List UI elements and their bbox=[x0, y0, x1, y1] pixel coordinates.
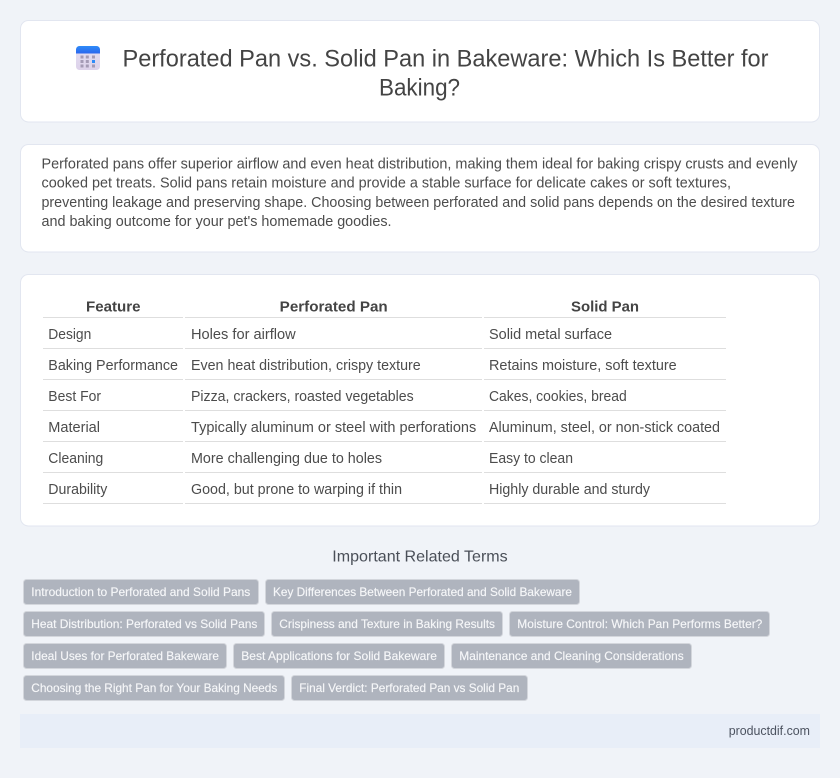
intro paragraph: cooked pet treats. Solid pans retain moisture and provide a stable surface for delicate cakes or soft textures, bbox=[42, 176, 731, 192]
title bbox=[122, 46, 768, 102]
tag bbox=[234, 644, 444, 668]
row: cleaning: Cleaning bbox=[48, 451, 103, 467]
table header row bbox=[86, 298, 639, 316]
tag bbox=[452, 644, 692, 668]
tag: Maintenance and Cleaning Considerations bbox=[459, 649, 684, 663]
tag bbox=[24, 612, 264, 636]
table header row: Feature bbox=[86, 298, 140, 316]
row: design bbox=[48, 327, 612, 343]
tag: Introduction to Perforated and Solid Pans bbox=[31, 585, 250, 599]
title: Baking? bbox=[379, 74, 460, 102]
tag bbox=[272, 612, 502, 636]
tag: Key Differences Between Perforated and Solid Bakeware bbox=[273, 585, 572, 599]
panel: introduction bbox=[20, 144, 820, 252]
row: best for: Pizza, crackers, roasted vegetables bbox=[191, 389, 414, 405]
row: best for: Best For bbox=[48, 389, 101, 405]
row: cleaning: More challenging due to holes bbox=[191, 451, 382, 467]
tag: Heat Distribution: Perforated vs Solid Pans bbox=[31, 617, 257, 631]
row: material bbox=[48, 420, 720, 436]
footer source text: productdif.com bbox=[729, 724, 810, 738]
row: design: Solid metal surface bbox=[489, 327, 612, 343]
row: cleaning bbox=[48, 451, 573, 467]
row: design: Design bbox=[48, 327, 91, 343]
tag bbox=[24, 580, 258, 604]
tag: Crispiness and Texture in Baking Results bbox=[279, 617, 495, 631]
tag bbox=[292, 676, 528, 700]
row: cleaning: Easy to clean bbox=[489, 451, 573, 467]
intro paragraph: and baking outcome for your pet's homemade goodies. bbox=[42, 214, 392, 230]
row: durability: Durability bbox=[48, 482, 108, 498]
tag bbox=[510, 612, 770, 636]
row: material: Aluminum, steel, or non-stick coated bbox=[489, 420, 720, 436]
tag: Final Verdict: Perforated Pan vs Solid Pan bbox=[299, 681, 519, 695]
table header row: Solid Pan bbox=[571, 298, 639, 316]
row: best for: Cakes, cookies, bread bbox=[489, 389, 627, 405]
panel: title header bbox=[20, 20, 820, 122]
tag bbox=[24, 676, 284, 700]
row: design: Holes for airflow bbox=[191, 327, 296, 343]
row: durability: Good, but prone to warping if thin bbox=[191, 482, 402, 498]
intro paragraph: preventing leakage and preserving shape. Choosing between perforated and solid pans depends on the desired texture bbox=[42, 195, 795, 211]
tags: related terms bbox=[24, 580, 770, 700]
tag bbox=[266, 580, 580, 604]
intro paragraph bbox=[42, 156, 798, 230]
table header row: Perforated Pan bbox=[280, 298, 388, 316]
intro paragraph: Perforated pans offer superior airflow and even heat distribution, making them ideal for baking crispy crusts and evenly bbox=[42, 156, 798, 172]
row: baking performance: Baking Performance bbox=[48, 358, 178, 374]
row: material: Typically aluminum or steel with perforations bbox=[191, 420, 476, 436]
tag: Best Applications for Solid Bakeware bbox=[241, 649, 437, 663]
title: Perforated Pan vs. Solid Pan in Bakeware: Which Is Better for bbox=[122, 46, 768, 72]
row: durability bbox=[48, 482, 651, 498]
row: baking performance: Even heat distribution, crispy texture bbox=[191, 358, 421, 374]
tag bbox=[24, 644, 226, 668]
tag: Ideal Uses for Perforated Bakeware bbox=[31, 649, 219, 663]
panel: comparison table bbox=[20, 274, 820, 526]
tag: Choosing the Right Pan for Your Baking Needs bbox=[31, 681, 277, 695]
row: baking performance bbox=[48, 358, 677, 374]
heading: important related terms: Important Related Terms bbox=[332, 549, 508, 566]
tag: Moisture Control: Which Pan Performs Better? bbox=[517, 617, 763, 631]
row: material: Material bbox=[48, 420, 100, 436]
row: baking performance: Retains moisture, soft texture bbox=[489, 358, 677, 374]
footer bbox=[20, 714, 820, 748]
row: best for bbox=[48, 389, 627, 405]
icon: calendar bbox=[76, 46, 100, 70]
row: durability: Highly durable and sturdy bbox=[489, 482, 651, 498]
